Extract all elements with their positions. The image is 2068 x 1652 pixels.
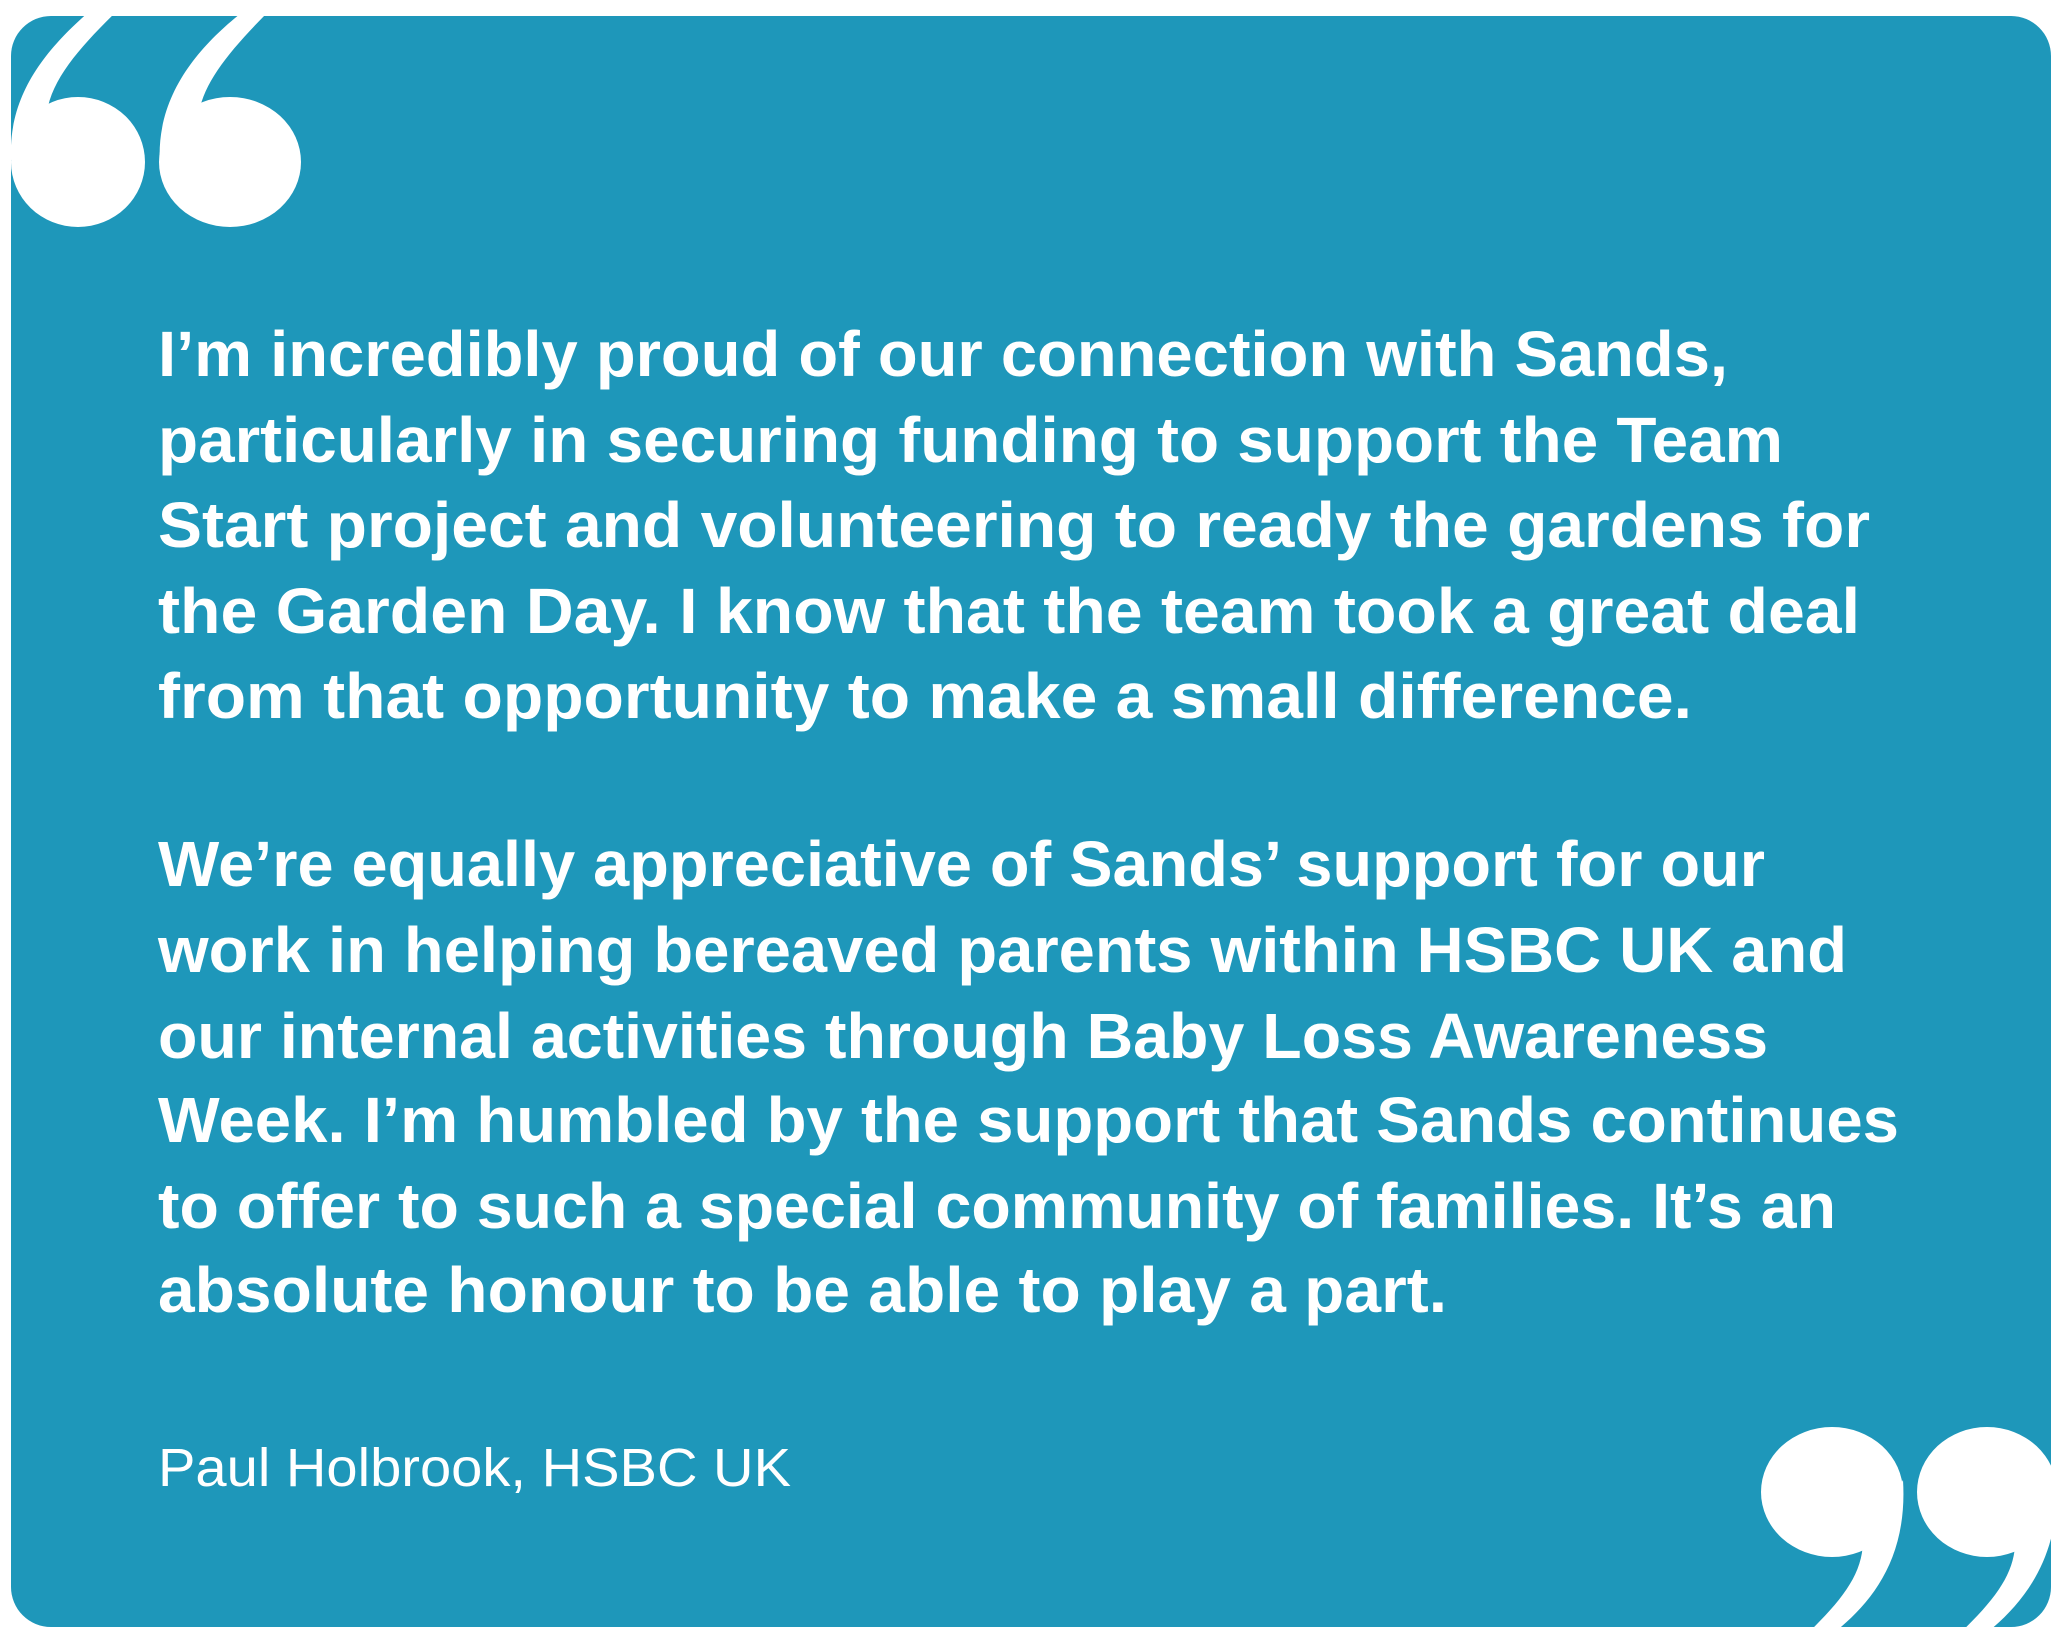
text block: quote: from that opportunity to make a small difference. (158, 660, 1692, 732)
text block: quote: to offer to such a special community of families. It’s an (158, 1170, 1836, 1242)
text block: quote: We’re equally appreciative of Sands’ support for our (158, 828, 1765, 900)
text block: quote: Week. I’m humbled by the support that Sands continues (158, 1084, 1899, 1156)
text block: quote: our internal activities through Baby Loss Awareness (158, 1000, 1768, 1072)
text block: quote: Start project and volunteering to ready the gardens for (158, 489, 1870, 561)
attribution: Paul Holbrook, HSBC UK (158, 1438, 791, 1498)
text block: quote: the Garden Day. I know that the team took a great deal (158, 575, 1860, 647)
text block: quote: I’m incredibly proud of our connection with Sands, (158, 318, 1728, 390)
text block: quote: absolute honour to be able to play a part. (158, 1254, 1447, 1326)
text block: quote: particularly in securing funding to support the Team (158, 404, 1783, 476)
icon: opening quotation mark (11, 10, 301, 227)
icon: closing quotation mark (1761, 1427, 2057, 1635)
text block: quote: work in helping bereaved parents within HSBC UK and (157, 914, 1847, 986)
text block: quote (157, 318, 1899, 1326)
